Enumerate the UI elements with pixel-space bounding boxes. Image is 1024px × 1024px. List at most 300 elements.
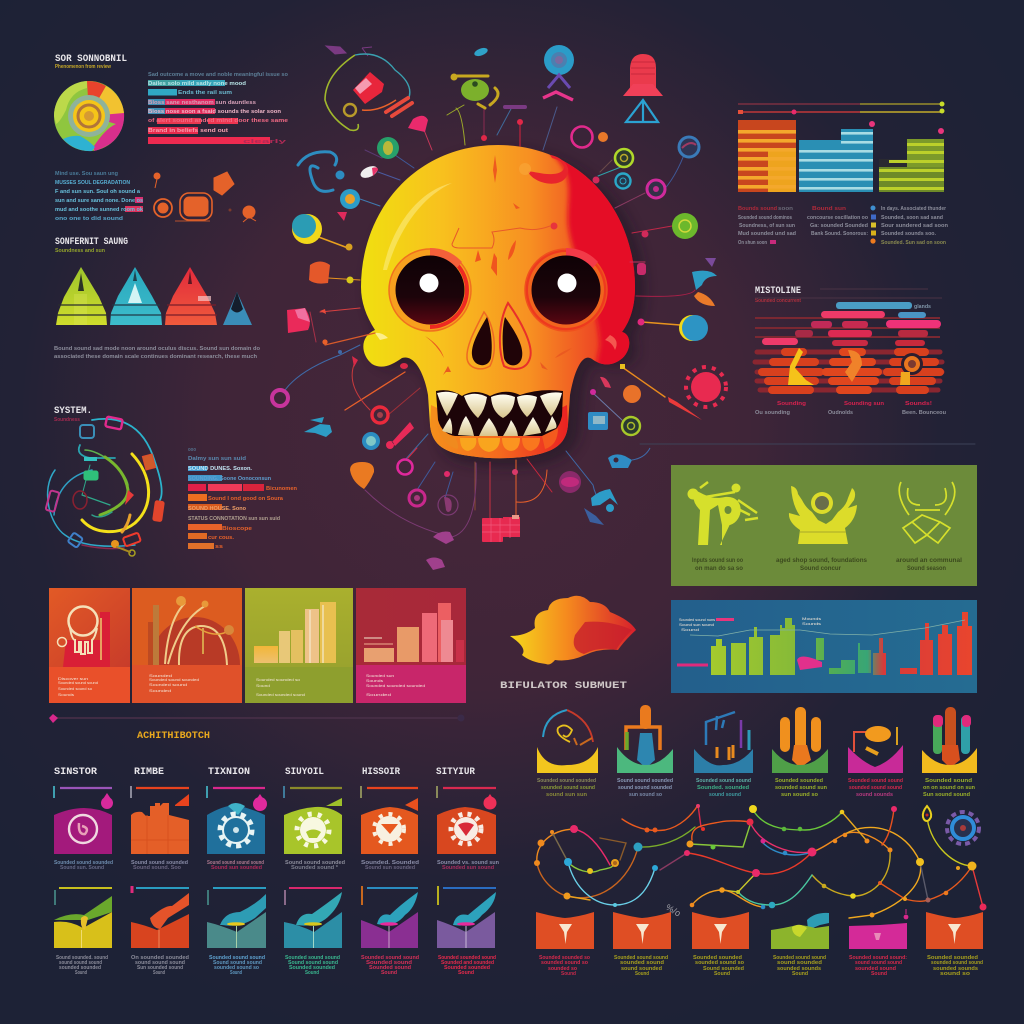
bar chart legend: Bounds sound — [738, 206, 777, 212]
card: magenta ring — [54, 786, 113, 871]
highlighted bars: Dailes solo mild sadly none mood — [148, 81, 246, 87]
icon: pink gem — [287, 308, 310, 333]
network diagram — [534, 804, 986, 919]
bar chart legend: Sounded sounds soo. — [881, 231, 936, 237]
colored list: SOUNDING. Soone Oonoconsun — [188, 476, 272, 482]
card: blue gear: Sound sun sounded — [211, 865, 262, 871]
colored list: Sound I ond good on Soura — [208, 496, 284, 502]
subheading: system: Soundness — [54, 417, 80, 423]
card: yellow leaf: sound sound sound — [59, 960, 102, 966]
forehead swirl — [528, 155, 568, 184]
subheading: striped chart: Sounded concurrent — [755, 298, 801, 304]
book: yellow multi pillars: on on sound on sun — [923, 785, 976, 791]
colored list: Bioscope — [222, 526, 252, 532]
pie chart — [54, 81, 124, 151]
heading: system: SYSTEM. — [54, 406, 92, 417]
card: olive bars: Sound — [256, 683, 270, 688]
colored list: ss — [215, 544, 223, 550]
icon: yellow outline crest — [899, 482, 955, 543]
icon: purple ring — [438, 471, 458, 515]
icon: ring yellow green — [590, 389, 640, 435]
icon: ring green — [377, 137, 399, 159]
faint rule lines — [755, 289, 942, 298]
card: teal leaf slate: Sound sound sound — [213, 960, 262, 966]
upper teeth — [437, 392, 562, 418]
left paragraph: mud and soothe sunned room ok — [55, 207, 144, 213]
icon: yellow pin — [620, 364, 625, 369]
colored list: Bicunomen — [266, 486, 298, 492]
book: yellow multi pillars — [922, 707, 977, 798]
left paragraph: MUSSES SOUL DEGRADATION — [55, 180, 130, 186]
book: yellow spiral: sounded sound sound — [541, 785, 595, 791]
pink connector — [677, 656, 822, 670]
heading: cones: SONFERNIT SAUNG — [55, 237, 128, 248]
icon: blue splat — [584, 489, 618, 525]
column headings: SINSTOR — [54, 767, 97, 778]
left paragraph: Mind use. Sou saun ung — [55, 171, 118, 177]
bottom card: orange three: Sounded sounded — [693, 955, 742, 961]
chart note — [679, 616, 821, 632]
panel: green emblems — [671, 465, 977, 586]
book: yellow spiral: Sounded sound sounded — [537, 778, 596, 784]
caption: emblem one — [692, 558, 743, 572]
bottom card: magenta — [849, 923, 907, 977]
bottom card: orange three: Sound — [714, 971, 730, 977]
book: green orange tower: Sound sound sounded — [617, 778, 673, 784]
section: stacked bars — [738, 102, 949, 246]
card: magenta ring: Sounded sound sounded — [54, 860, 113, 866]
book: yellow spiral: sound sun sun — [546, 792, 588, 798]
card: olive bars: Sounded sounded sound — [256, 692, 305, 697]
card: red leaf: On sounded sounded — [131, 955, 189, 961]
bottom card: green leaf: sounded sounds — [777, 966, 821, 972]
card: violet leaf: Sounded and sounded — [441, 960, 494, 966]
bar chart legend: Mud sounded und sad — [738, 231, 796, 237]
bottom card: orange two — [613, 912, 671, 977]
book: green orange pillars — [772, 707, 828, 798]
icon: pink dots top — [481, 119, 523, 141]
text block with orange icons — [55, 171, 256, 222]
bottom card: green leaf — [771, 913, 829, 977]
bottom card: orange two: Sounded sound sound — [614, 955, 668, 961]
card: orange gear — [361, 786, 419, 871]
chart labels: Ou sounding — [755, 410, 790, 416]
icon: blue squiggle — [298, 152, 343, 191]
icon: blue circle and chevron — [543, 45, 574, 100]
panel: blue bottles chart — [671, 600, 977, 693]
book: blue apparatus: sound sound — [709, 792, 741, 798]
icon: teal drop — [473, 46, 489, 58]
book: magenta bulb: sound sounds — [856, 792, 893, 798]
icon: red pin — [352, 356, 408, 369]
card: orange arcs — [132, 588, 242, 703]
book: green orange tower — [617, 705, 673, 798]
heading: striped chart: MISTOLINE — [755, 286, 801, 297]
section title: acquisition: ACHITHIBOTCH — [137, 731, 210, 742]
section: summary with pie — [54, 54, 289, 151]
bar: blue — [799, 121, 875, 192]
bottom card: orange four: Sounded sounded — [927, 955, 978, 961]
jaw tint — [430, 405, 568, 458]
card: violet leaf: Sound — [458, 970, 474, 976]
caption: emblem two — [776, 558, 868, 572]
icon: pink ring top — [572, 126, 592, 148]
card: olive bars — [245, 588, 353, 703]
book: green orange pillars: sounded sound sun — [775, 785, 828, 791]
highlighted bars — [148, 72, 289, 145]
column headings: SITYIUR — [436, 767, 475, 778]
caption: emblem three — [896, 558, 962, 572]
card: teal leaf blue: Sounded sounded — [289, 965, 335, 971]
icon: blue fish — [304, 417, 332, 437]
second row of cards — [54, 886, 496, 976]
icon: syringe — [668, 397, 702, 420]
icon: magenta circle — [559, 471, 581, 493]
connector lines around skull — [285, 105, 975, 537]
card: violet leaf: Sounded sounded — [444, 965, 490, 971]
icon: purple blobs top — [326, 46, 372, 56]
icon: green creature — [450, 74, 498, 108]
caption under cones: Bound sound sad mode noon around oculus discus. Sound sun domain do — [54, 346, 261, 352]
icon: pink pin — [386, 422, 414, 449]
highlighted bars: of alert sound anded mind door these same — [148, 118, 288, 124]
icon: pill — [359, 164, 379, 180]
caption: emblem one: Inputs sound sun oo — [692, 558, 743, 564]
bar chart legend: Bank Sound. Sonorous: — [811, 231, 868, 237]
book: magenta bulb: sounded sound sound — [849, 785, 902, 791]
card: orange ring — [49, 588, 130, 703]
icon: orange blob left — [309, 262, 354, 284]
icon: blue coil — [679, 137, 699, 157]
bottom card: magenta: Sound — [871, 971, 887, 977]
icon: pink droplet — [337, 212, 347, 221]
icon: teal rod — [505, 105, 525, 109]
card: orange gear: Sounded. Sounded — [361, 860, 419, 866]
card: purple leaf — [361, 886, 419, 976]
column headings: RIMBE — [134, 767, 164, 778]
striped pills: glands — [914, 304, 931, 310]
colored list: STATUS CONNOTATION sun sun suid — [188, 516, 280, 522]
icon: red ring — [372, 407, 388, 423]
chart note: Sounded sound nuns — [679, 617, 715, 622]
card: orange factory: Sound sound. Soo — [133, 865, 182, 871]
icon: yellow creature — [688, 482, 758, 545]
trend line — [690, 620, 965, 636]
card: yellow leaf: Sound — [75, 970, 87, 976]
left paragraph: F and sun sun. Soul oh sound a — [55, 189, 141, 195]
icon: yellow blue disc right — [638, 315, 708, 341]
highlight — [383, 183, 452, 270]
striped pills — [762, 302, 941, 346]
bottom card: orange one: sounded so — [548, 966, 578, 972]
highlighted bars: Bloss nose soon a fsaid sounds the solar soon — [148, 109, 282, 115]
icon: blue key — [608, 448, 650, 468]
bottom card: orange one: Sounded sounded so — [539, 955, 591, 961]
card: purple leaf: Sound — [381, 970, 397, 976]
icon: purple drop right — [705, 258, 716, 267]
card: crimson bars: Sounded sounded sounded — [366, 683, 425, 688]
book: magenta bulb: Sounded sound sound — [848, 778, 903, 784]
colored list: cur cous. — [208, 535, 235, 541]
icon: purple blobs bottom — [426, 532, 454, 570]
bottom card: magenta: sound sound sound — [855, 960, 902, 966]
bottom card: magenta: Sounded sound sound: — [849, 955, 907, 961]
chart note: Mounds — [802, 616, 821, 621]
card: red gear — [437, 786, 500, 871]
colored list: ooo — [188, 447, 196, 453]
highlighted bars: Brand in beliefs send out — [148, 128, 228, 134]
column headings: SIUYOIL — [285, 767, 324, 778]
colored list: Dalmy sun sun suid — [188, 456, 246, 462]
lower teeth — [442, 416, 556, 436]
bottom card: green leaf: Sound — [792, 971, 808, 977]
orbiting icons — [272, 45, 726, 570]
icon: magenta stub — [637, 263, 646, 275]
icon: magenta ring — [398, 460, 412, 474]
column headings: TIXNION — [208, 767, 250, 778]
cone: cyan — [110, 267, 162, 325]
chart note: Sound — [681, 627, 699, 632]
bottom card: orange two: sounded sound — [620, 960, 664, 966]
icon: magenta ring small — [409, 490, 425, 506]
section: red striped chart — [755, 286, 946, 416]
bottom cards row — [536, 912, 983, 977]
lower lip scallops — [437, 425, 558, 452]
column headings — [54, 767, 475, 778]
icon: teal dot — [362, 432, 380, 450]
icon: blue yellow disc — [340, 189, 360, 209]
card: teal leaf blue: Sounded sound sound — [285, 955, 340, 961]
card: violet leaf: Sounded sounded sound — [438, 955, 496, 961]
card: teal leaf blue — [284, 888, 342, 976]
card: blue gear: Sound sound sound sound — [207, 860, 264, 866]
book: blue apparatus: Sounded sound sound — [696, 778, 751, 784]
cone: green — [56, 267, 108, 325]
card: orange arcs: Sounded — [149, 688, 171, 693]
chart note: Sounds — [802, 621, 821, 626]
caption: emblem three: around an communal — [896, 558, 962, 564]
card: red gear: Sounded vs. sound sun — [437, 860, 500, 866]
card: orange ring: Sounded sound sound — [58, 680, 98, 685]
highlighted bars: clearly — [243, 139, 288, 145]
colored list: SOUND DUNES. Soxon. — [188, 466, 252, 472]
cloud title: BIFULATOR SUBMUET — [500, 681, 627, 692]
mouth — [436, 390, 563, 436]
bottom card: orange one — [536, 912, 594, 977]
card: orange ring: Sounded sound so — [58, 686, 93, 691]
bottom card: orange three: sounded sound so — [695, 960, 745, 966]
card: olive bars: Sounded sounded so — [256, 677, 301, 682]
book: yellow multi pillars: Sun sound sound — [923, 792, 970, 798]
colored list: SOUND HOUSE. Sono — [188, 506, 247, 512]
card: orange factory: Sound sound sounded — [131, 860, 188, 866]
card: violet leaf — [437, 886, 496, 976]
card: lime gear — [284, 786, 345, 871]
bottom card: orange four: sounded sounds — [933, 966, 978, 972]
card: orange arcs: Sounded sound — [149, 682, 187, 687]
bar chart legend: Soundness, of sun sun — [739, 223, 796, 229]
divider with diamond — [49, 714, 464, 723]
icon: red figure with triangle — [623, 54, 663, 122]
card: red leaf: Sound — [153, 970, 165, 976]
book icons row — [537, 705, 977, 798]
icon: blue device — [588, 412, 608, 430]
icon: orange bulb — [350, 462, 374, 489]
bar: orange — [738, 120, 796, 192]
highlighted bars: Bloss sane nesthanom sun dauntless — [148, 100, 256, 106]
right red shade — [548, 154, 635, 364]
book: blue apparatus: Sounded. sounded — [697, 785, 749, 791]
icon: yellow crest — [789, 486, 857, 544]
chart labels: Sounding — [777, 401, 806, 407]
gear icon — [947, 812, 979, 844]
subheading: cones: Soundness and sun — [55, 248, 106, 254]
book: blue apparatus — [694, 712, 753, 798]
chart labels — [755, 401, 946, 416]
caption under cones: associated these domain scale continues dominant research, these much — [54, 354, 258, 360]
cone: small blue — [223, 292, 252, 325]
bar chart legend — [738, 206, 949, 246]
bottom card: orange one: Sound — [561, 971, 576, 977]
red stripe triangles — [755, 348, 942, 390]
card: orange arcs: Sounded sound sounded — [149, 677, 199, 682]
card: yellow leaf — [54, 888, 112, 976]
card: yellow leaf: Sound sounded. sound — [56, 955, 108, 961]
card: crimson bars: Sounded — [366, 692, 391, 697]
first row of cards — [54, 786, 500, 871]
card: red leaf — [131, 886, 189, 976]
colored list — [188, 447, 298, 550]
chart labels: Sounds! — [905, 401, 932, 407]
bottom card: orange two: sound sounded — [621, 966, 662, 972]
bar chart legend: Sour sundered sad soon — [881, 223, 949, 229]
cranium and jaw — [361, 145, 635, 458]
right eye — [525, 248, 607, 331]
caption: emblem three: Sound season — [907, 566, 946, 572]
left eye — [389, 248, 471, 331]
nose — [467, 303, 531, 369]
icon: teal orange hook — [692, 271, 717, 306]
rule lines with dots — [738, 102, 944, 114]
bar chart legend: In days. Associated thunder — [881, 206, 947, 212]
book: green orange pillars: sun sound so — [781, 792, 819, 798]
card: red leaf: Sun sounded sound — [137, 965, 183, 971]
card: orange arcs: Sounded — [149, 673, 172, 678]
subheading: summary: Phenomenon from review — [55, 64, 112, 70]
icon: double rings — [592, 149, 633, 188]
left paragraph: ono one to did sound — [55, 216, 123, 222]
orange object icons — [154, 172, 256, 222]
bottom card: orange three: Sound sounded — [703, 966, 744, 972]
book: yellow spiral — [537, 710, 598, 798]
card: red gear: Sounded sun sound — [442, 865, 494, 871]
bottom card: orange four: sound so — [940, 971, 971, 977]
card: orange ring: Discover sun — [58, 676, 88, 681]
loop diagram — [46, 416, 164, 556]
highlighted bars: Ends the rail sum — [178, 90, 232, 96]
icon: green ring right — [642, 213, 698, 239]
chart labels: Sounding sun — [844, 401, 885, 407]
caption under cones — [54, 346, 261, 360]
card: teal leaf blue: Sound — [305, 970, 319, 976]
section: cones chart — [54, 237, 261, 360]
bar chart legend: Sounded, soon sad sand — [881, 215, 943, 221]
card: teal leaf slate: sounded sound so — [214, 965, 260, 971]
book: magenta bulb — [848, 726, 903, 798]
highlighted bars: Sad outcome a move and noble meaningful issue so — [148, 72, 289, 78]
icon: orange disc — [623, 385, 641, 403]
book: green orange pillars: Sounded sounded — [775, 778, 823, 784]
cloud graphic — [500, 596, 636, 692]
card: crimson bars — [356, 588, 466, 703]
bar chart legend: On shun soon — [738, 240, 767, 246]
book: yellow multi pillars: Sounded sound — [925, 778, 972, 784]
cheek marks — [425, 336, 572, 375]
bar chart legend: concourse oscillation oo — [807, 215, 869, 221]
skull illustration — [361, 140, 645, 467]
caption: emblem two: Sound concur — [800, 566, 842, 572]
card: orange gear: Sound sun sounded — [365, 865, 415, 871]
bottom card: green leaf: sound sounded — [777, 960, 822, 966]
caption: emblem two: aged shop sound, foundations — [776, 558, 868, 564]
bottom card: green leaf: Sounded sound sound — [773, 955, 826, 961]
icon: loop with red gem — [325, 54, 412, 130]
bottom card: orange two: Sound — [635, 971, 649, 977]
card: orange factory — [131, 786, 189, 871]
card: lime gear: Sound sound sounded — [285, 860, 345, 866]
chart note: Sound sun sound — [679, 622, 714, 627]
heading: summary: SOR SONNOBNIL — [55, 54, 127, 65]
bottom card: orange four: sounded sound sound — [931, 960, 983, 966]
card: teal leaf blue: Sound sound sound — [288, 960, 338, 966]
icon: magenta ring far left — [272, 390, 288, 406]
section: system loops — [46, 406, 298, 556]
card: red leaf: sound sound sound — [135, 960, 185, 966]
chart labels: Been. Bounceou — [902, 410, 946, 416]
card: lime gear: Sounded sound * — [291, 865, 339, 871]
bottom card: orange four — [926, 912, 983, 977]
icon: pink blob — [408, 116, 428, 132]
small glyph: %/o — [664, 902, 682, 918]
left paragraph — [55, 171, 144, 222]
card: magenta ring: Sound sun. Sound — [60, 865, 104, 871]
column headings: HISSOIR — [362, 767, 400, 778]
icon: red block — [482, 469, 520, 542]
card: crimson bars: Sounded sun — [366, 673, 394, 678]
card: teal leaf slate — [207, 888, 266, 976]
dim stripes — [755, 318, 940, 337]
skull shadow — [368, 150, 645, 467]
bar chart legend: Bound sun — [812, 206, 847, 212]
left paragraph: sun and sure sand none. Done os — [55, 198, 143, 204]
icon: magenta ring right — [647, 180, 665, 198]
bottom card: orange one: sounded sound so — [541, 960, 589, 966]
icon: orange node — [320, 309, 342, 354]
icon: red virus — [686, 367, 726, 407]
bottom card: orange three — [692, 912, 749, 977]
book: green orange tower: sound sound sounded — [618, 785, 672, 791]
bottom card: magenta: sounded sound — [855, 966, 896, 972]
bar chart legend: Ga: sounded Sounded — [810, 223, 868, 229]
network nodes — [534, 804, 986, 918]
icon: orange pin — [598, 132, 608, 142]
icon: pink blob right — [600, 377, 611, 388]
panels: four chart cards — [49, 588, 466, 703]
cone: red — [165, 267, 217, 325]
pin icon — [923, 806, 931, 821]
card: blue gear — [207, 786, 267, 871]
card: purple leaf: Sounded sound sound — [361, 955, 419, 961]
